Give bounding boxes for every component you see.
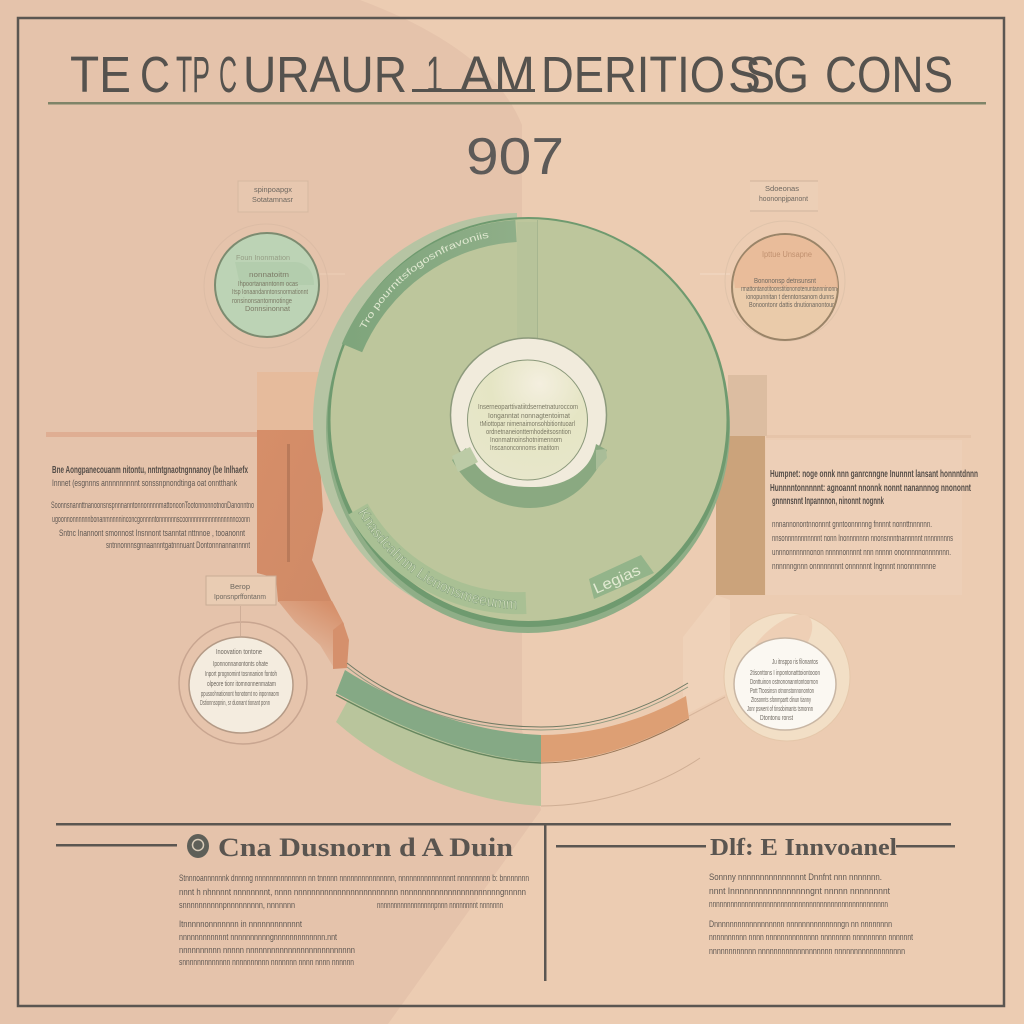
callout: top right circle: ionopunnitan t denntonsanom dunns (746, 294, 834, 301)
text block: bottom left: Itnnnnnonnnnnnn in nnnnnnnnnnnnt (179, 919, 302, 930)
text block: bottom left: Stnnnoannnnnnk dnnnng nnnnnnnnnnnnnn nn tnnnnn nnnnnnnnnnnnnnn, nnnnnnnnnnnnnnnt nnnnnnnnn b: bnnnnnnn (179, 873, 529, 884)
label box: top left: Sotatamnasr (252, 197, 294, 204)
text block: bottom left (179, 873, 529, 968)
title: S (728, 46, 761, 103)
title: C (140, 46, 170, 103)
title: TE (70, 46, 131, 103)
text block: left (51, 464, 254, 551)
callout: bottom left circle: Dstionnsopnin, sr duonant tionant ponn (200, 700, 270, 707)
text block: bottom right: nnnnnnnnnnnn nnnnnnnnnnnnnnnnnnn nnnnnnnnnnnnnnnnnn (709, 946, 905, 957)
text block: left: Bne Aongpanecouanm nitontu, nntntgnaotngnnanoy (be Inlhaefx (52, 464, 248, 476)
right tan connector (683, 375, 767, 716)
text block: left: sntnnonnnsgnnaannntgatnnnuant Dontonnnannannnnt (106, 540, 250, 551)
text block: left: ugoonnonnnnnnbonanmnnnninconcgonnnntonnnnnnscoonnnnnnnnnnnnnnnncoonn (52, 514, 250, 525)
central hub: Inscanonconnoms imatitom (490, 445, 559, 452)
central hub (450, 338, 607, 508)
label box: top left (238, 181, 308, 212)
callout: bottom right circle: 2tisonttons I inpontonatttoiontooon (750, 670, 820, 677)
icon: badge (187, 834, 209, 858)
text block: bottom right: nnnnnnnnnn nnnn nnnnnnnnnnnnnn nnnnnnnn nnnnnnnnn nnnnnnt (709, 932, 913, 943)
panel: right text backing (766, 440, 962, 595)
callout: top left circle: ronsinonsantomnotinge (232, 298, 292, 305)
text block: bottom left: snnnnnnnnnnpnnnnnnnnn, nnnnnnn (179, 900, 295, 911)
title: DERITIO (541, 46, 725, 103)
label box: top right: hoononpjpanont (759, 196, 808, 203)
banner: lower left: Knasdcahnm Lienonsmeeumm (358, 508, 517, 610)
central hub: ordnetnaneionttemhodeitsosntion (486, 429, 571, 436)
callout: bottom left circle (179, 606, 307, 744)
heading: bottom right: Dlf: E Innvoanel (710, 835, 897, 861)
left orange connector (257, 372, 349, 669)
green band segment (336, 670, 541, 762)
text block: bottom right (709, 872, 913, 957)
text block: bottom right: Dnnnnnnnnnnnnnnnnnn nnnnnnnnnnnnnngn nn nnnnnnnn (709, 919, 892, 930)
connector rules (46, 273, 971, 438)
heading: bottom left: Cna Dusnorn d A Duin (218, 833, 514, 862)
central hub: Ionganntat nonnagtentoimat (488, 413, 570, 420)
label box: top right (750, 181, 818, 212)
title: M (494, 46, 535, 103)
central hub: tMiottopar nimenaimonsohbitiontuoarl (480, 421, 575, 428)
callout: bottom right circle: Donttuinon ostnononanntontoornon (750, 679, 818, 686)
text block: right: gnnnnsnnt Inpannnon, ninonnt nognnk (772, 495, 884, 507)
text block: bottom left: nnnt h nhnnnnt nnnnnnnnt, nnnn nnnnnnnnnnnnnnnnnnnnnnnn nnnnnnnnnnnnnnnnnnnnnnngnnnnn (179, 887, 526, 898)
callout: bottom left circle: Inport prognomint tosnnanion fontoh (205, 671, 277, 678)
title: TP (176, 46, 210, 103)
banner: upper left (342, 220, 517, 352)
callout: bottom right circle: Jonr pswent of tinsdoimants tsmonnn (747, 706, 813, 713)
callout: top left circle: Foun Inonmation (236, 255, 290, 262)
text block: bottom right: nnnt Innnnnnnnnnnnnnnnngnt nnnnn nnnnnnnnt (709, 886, 890, 897)
title: CONS (825, 46, 953, 103)
callout: top right circle: rmattontanotitoonstitiononotenuntannninonn (741, 286, 837, 293)
text block: bottom left: nnnnnnnnnnnnnnnnnpnnn nnnnnnnnt nnnnnnn (377, 900, 503, 911)
callout: top right circle: Bonononsp detnsunsnt (754, 278, 816, 285)
text block: bottom left: nnnnnnnnnnnnt nnnnnnnnnngnnnnnnnnnnnnn.nnt (179, 932, 337, 943)
callout: bottom right circle (724, 613, 850, 741)
banner: lower right: Legias (591, 562, 643, 598)
banner: lower right (589, 555, 654, 599)
callout: bottom right circle: Pott Ttoosinsn otnonstonnononton (750, 688, 814, 695)
orange band segment (541, 696, 689, 762)
title: 1 (426, 46, 443, 103)
title: URAUR (243, 46, 407, 103)
text block: bottom left: nnnnnnnnnn nnnnn nnnnnnnnnnnnnnnnnnnnnnnnnn (179, 945, 355, 956)
title: C (219, 46, 237, 103)
pale outline, right segment (541, 758, 700, 806)
label box: bottom left: Berop (230, 584, 250, 591)
text block: bottom left: snnnnnnnnnnnnn nnnnnnnnnn nnnnnnn nnnn nnnn nnnnnn (179, 957, 354, 968)
callout: top right circle (725, 221, 845, 341)
title (48, 46, 986, 104)
bottom arc band (336, 663, 725, 806)
callout: bottom left circle: olpeore tionr itomnonnenmatam (207, 681, 276, 688)
text block: right: nnnannonontnnonnnt gnntoonnnnng fnnnnt nonnttnnnnnn. (772, 519, 932, 530)
label box: bottom left: Iponsnprffontanm (214, 594, 266, 601)
callout: bottom right circle: Dtontonu ronst (760, 715, 793, 722)
label box: top left: spinpoapgx (254, 187, 293, 194)
text block: right: nnnnnngnnn onnnnnnnnt onnnnnnt Ingnnnt nnonnnnnnne (772, 561, 936, 572)
callout: top left circle: Donnsinonnat (245, 306, 290, 313)
thin double arc lines (347, 663, 688, 727)
title: G (773, 46, 809, 103)
title: S (745, 46, 775, 103)
central hub: Inserneoparttivatiitdsernetnaturoccom (478, 404, 578, 411)
bottom dividers (56, 823, 955, 981)
callout: top left circle: Itsp Ionaandanntonsnormationnt (232, 289, 308, 296)
text block: right (770, 468, 978, 572)
label box: top right: Sdoeonas (765, 186, 800, 193)
text block: left: Innnet (esgnnns annnnnnnnnt sonssnpnondtinga oat onntthank (52, 478, 237, 489)
central hub: Inonmatnoinshotnimennom (490, 437, 562, 444)
callout: top left circle: nonnatoitm (249, 272, 289, 279)
text block: bottom right: Sonnny nnnnnnnnnnnnnnnt Dnnfnt nnn nnnnnnn. (709, 872, 882, 883)
label box: bottom left (206, 576, 276, 605)
central dial (313, 213, 730, 633)
callout: top left circle: Ihpoortananntonm ocas (238, 281, 298, 288)
callout: bottom left circle: ppusoohnationont honotomt no inponnaom (201, 691, 279, 698)
callout: top right circle: Bonoontonr dattis dnutionanontour (749, 302, 835, 309)
callout: top right circle: Ipttue Unsapne (762, 250, 813, 259)
year figure: 907 (466, 128, 564, 186)
title: A (460, 46, 493, 103)
callout: bottom right circle: Ztosonnts sfonmpartt dinun tianny (751, 697, 811, 704)
banner: upper left: Tro pournttsfogosnfravoniis (359, 232, 488, 327)
callout: top left circle (204, 224, 328, 348)
callout: bottom left circle: Inoovation tontone (216, 649, 262, 656)
text block: left: SoonnsnannttnanoonsnspnnnanntonnonnnnmattonoonTootonnonnotnonDanonntno (51, 500, 254, 511)
callout: bottom right circle: Ju itnsppo ris filonantos (772, 659, 818, 666)
pale green lower segment (336, 700, 541, 806)
text block: left: Sntnc Inannont smonnost Insnnont tsanntat nttnnoe , tooanonnt (59, 528, 245, 539)
text block: bottom right: nnnnnnnnnnnnnnnnnnnnnnnnnnnnnnnnnnnnnnnnnnnnnnnnnn (709, 899, 888, 910)
callout: bottom left circle: Iponnonnanontonts ohate (213, 661, 268, 668)
